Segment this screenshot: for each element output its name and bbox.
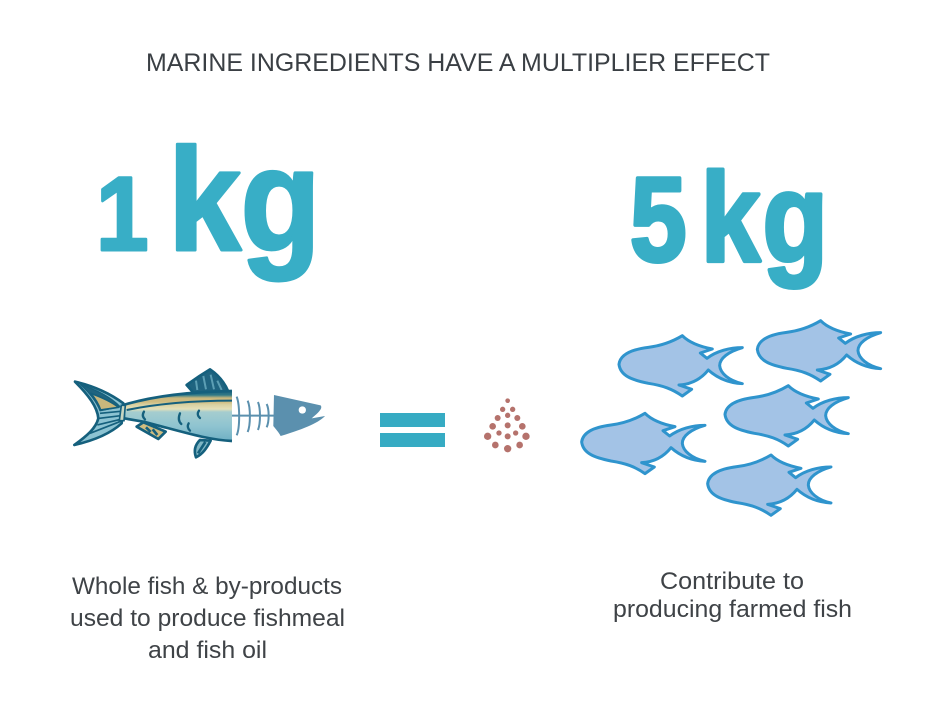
big number: 1kg: 1 bbox=[96, 156, 149, 273]
title: MARINE INGREDIENTS HAVE A MULTIPLIER EFFECT bbox=[146, 49, 770, 77]
farmed fish 1 bbox=[619, 336, 742, 396]
farmed fish school bbox=[582, 321, 881, 515]
belly fin bbox=[195, 440, 211, 457]
big number: 5kg: 5 bbox=[630, 152, 687, 287]
fish head bbox=[273, 395, 325, 436]
tail bbox=[74, 382, 123, 445]
fish skeleton spine and ribs bbox=[232, 397, 277, 435]
farmed fish 3 bbox=[725, 386, 848, 446]
icon: fishmeal pellets bbox=[484, 398, 530, 452]
icon: half fish half skeleton bbox=[74, 369, 325, 457]
eye bbox=[299, 406, 306, 414]
farmed fish 5 bbox=[708, 455, 831, 515]
dorsal fin bbox=[187, 369, 228, 393]
left caption: Whole fish & by-products bbox=[72, 573, 342, 600]
left caption bbox=[70, 573, 345, 664]
lower fin bbox=[137, 422, 166, 439]
right caption bbox=[613, 568, 852, 623]
big number: 5kg: k bbox=[701, 147, 761, 288]
farmed fish 4 bbox=[582, 413, 705, 474]
left caption: used to produce fishmeal bbox=[70, 605, 345, 632]
fish body bbox=[119, 391, 232, 441]
big number: 1kg: k bbox=[168, 119, 242, 282]
right caption: producing farmed fish bbox=[613, 596, 852, 623]
big number: 1kg: g bbox=[240, 119, 321, 282]
icon: equals sign bbox=[380, 413, 445, 447]
big number: 5kg: g bbox=[762, 147, 828, 288]
farmed fish 2 bbox=[757, 321, 881, 381]
right caption: Contribute to bbox=[660, 568, 804, 595]
left caption: and fish oil bbox=[148, 637, 267, 664]
body markings bbox=[143, 411, 200, 431]
